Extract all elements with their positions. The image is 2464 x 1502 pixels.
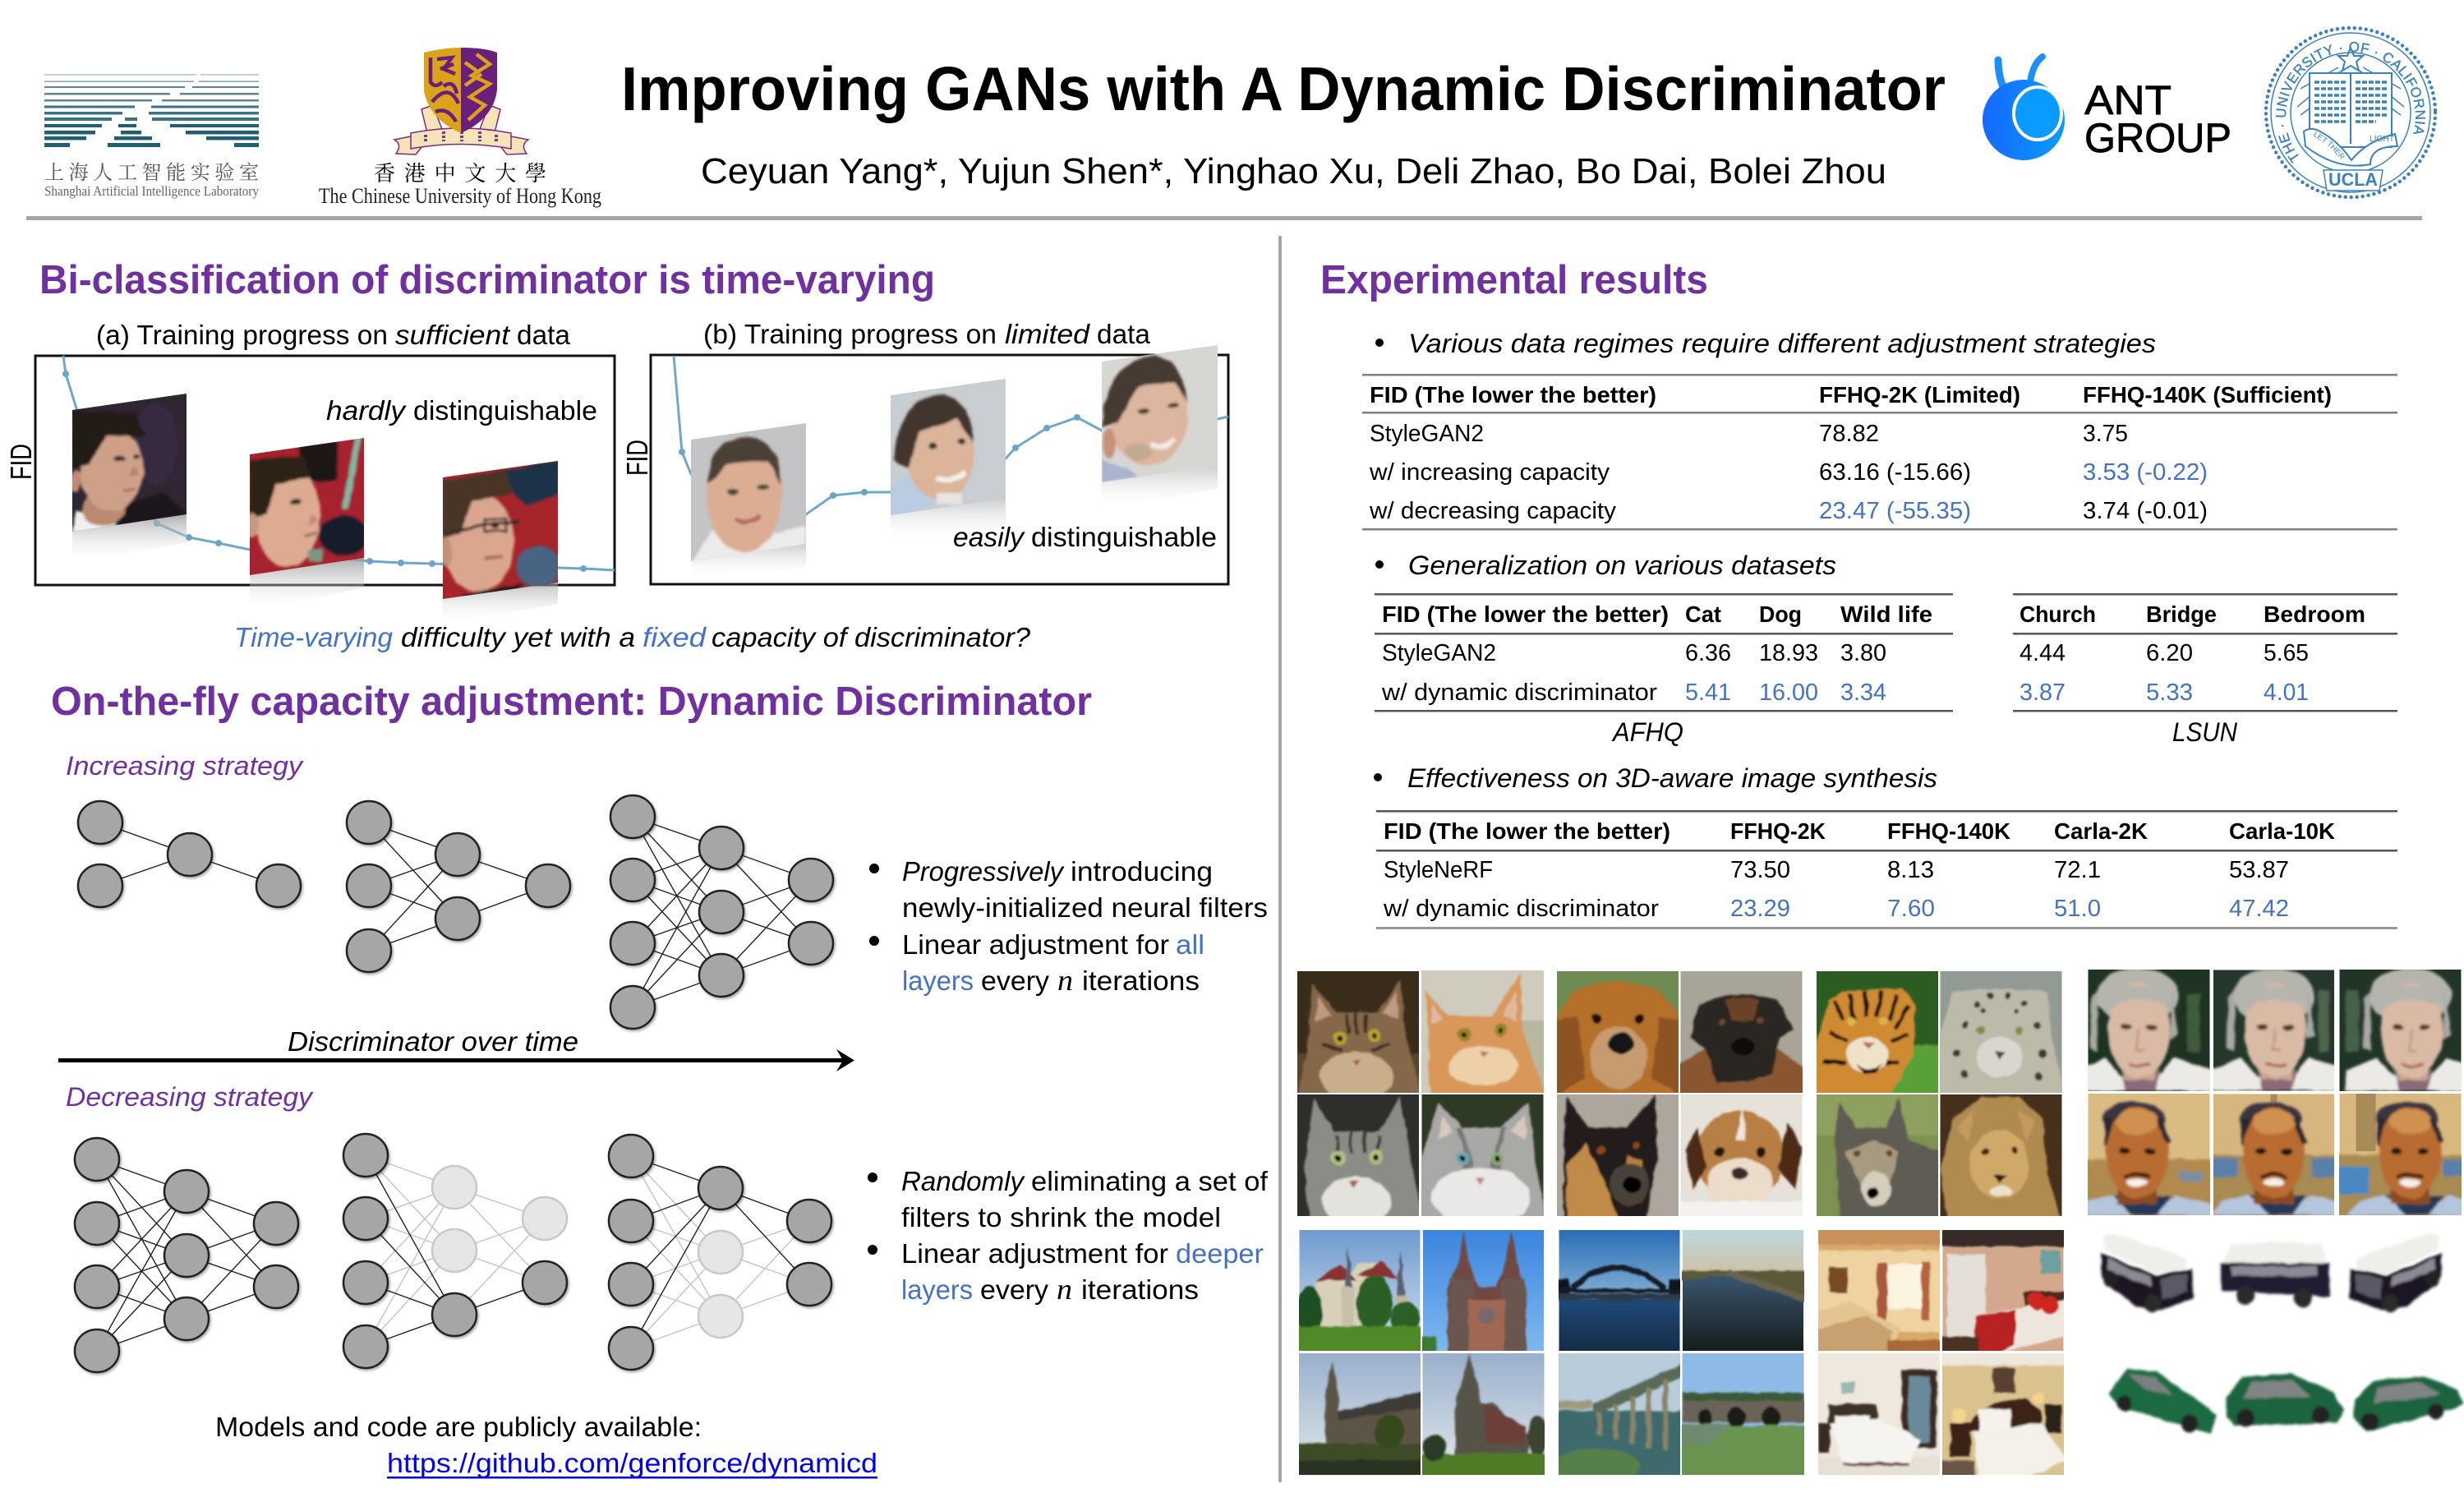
logo: Shanghai AI Laboratory: [44, 74, 259, 199]
table: data regimes: 3.75: [2083, 421, 2128, 447]
bullets: increasing: n: [1057, 964, 1073, 997]
generated face 6: [1102, 345, 1218, 491]
bullets: decreasing: Randomly: [901, 1166, 1025, 1196]
table: 3D-aware synthesis: 47.42: [2229, 896, 2289, 922]
generated face 4: [691, 423, 806, 565]
bullets: increasing: newly-initialized neural filters: [902, 892, 1268, 923]
table: data regimes: FID (The lower the better): [1370, 382, 1656, 408]
chart title b: [703, 319, 1151, 349]
bullets: increasing: iterations: [1082, 965, 1200, 996]
table: AFHQ: 6.36: [1685, 640, 1731, 666]
code link note: [215, 1412, 877, 1479]
network: decreasing step 1: [75, 1138, 298, 1372]
bullets: increasing: layers: [902, 965, 974, 996]
table: data regimes: 63.16 (-15.66): [1819, 459, 1971, 486]
table: data regimes: FFHQ-2K (Limited): [1819, 382, 2020, 408]
authors: Ceyuan Yang*, Yujun Shen*, Yinghao Xu, Deli Zhao, Bo Dai, Bolei Zhou: [701, 151, 1886, 191]
dog golden: [1557, 971, 1679, 1093]
bridge viaduct: [1559, 1353, 1680, 1475]
header rule: [26, 216, 2422, 220]
chart title a: [96, 320, 571, 350]
logo: Shanghai AI Laboratory: 上海人工智能实验室: [44, 162, 259, 184]
network: decreasing step 2: [343, 1134, 567, 1368]
column divider: [1278, 236, 1282, 1482]
logo: Shanghai AI Laboratory: Shanghai Artificial Intelligence Laboratory: [44, 183, 259, 199]
logo: CUHK: 香港中文大學: [374, 162, 546, 186]
table: 3D-aware synthesis: StyleNeRF: [1384, 857, 1493, 883]
bullets: increasing: Linear adjustment for: [902, 929, 1169, 960]
chart a: sufficient data: [4, 356, 615, 624]
table: AFHQ: Dog: [1759, 601, 1802, 627]
chart title b: (b) Training progress on: [703, 319, 997, 349]
table: data regimes: [1362, 374, 2397, 531]
table: 3D-aware synthesis: 72.1: [2054, 857, 2101, 883]
table: LSUN: 5.33: [2146, 680, 2193, 706]
logo: UCLA seal: THE · UNIVERSITY · OF · CALIFORNIA: [2276, 41, 2425, 164]
chart b: limited data: distinguishable: [1031, 522, 1217, 552]
question: difficulty yet with a: [401, 622, 635, 652]
table: 3D-aware synthesis: FID (The lower the better): [1384, 818, 1670, 844]
van view 3: [2349, 1233, 2442, 1312]
bullets: decreasing: n: [1057, 1273, 1072, 1306]
label: increasing strategy: Increasing strategy: [66, 751, 304, 781]
logo: UCLA seal: [2264, 26, 2437, 199]
question: [234, 622, 1031, 652]
table: 3D-aware synthesis: 73.50: [1730, 857, 1790, 883]
table: 3D-aware synthesis: 8.13: [1887, 857, 1934, 883]
table: AFHQ: 16.00: [1759, 680, 1818, 706]
image grid: LSUN samples: [1295, 1226, 2068, 1485]
van view 1: [2101, 1233, 2194, 1312]
table: 3D-aware synthesis: FFHQ-2K: [1730, 818, 1826, 844]
table: LSUN: 6.20: [2146, 640, 2193, 666]
table: 3D-aware synthesis: Carla-2K: [2054, 818, 2148, 844]
man view 2: [2213, 1094, 2334, 1215]
bullets: decreasing: eliminating a set of: [1031, 1166, 1269, 1196]
cat fluffy: [1421, 1094, 1544, 1216]
car view 2: [2227, 1374, 2344, 1427]
table: AFHQ: 18.93: [1759, 640, 1818, 666]
bullets: decreasing: layers: [901, 1274, 973, 1305]
chart title a: data: [517, 320, 571, 350]
dog shepherd: [1557, 1094, 1679, 1216]
generated face 2: [250, 438, 364, 595]
network: increasing step 2: [347, 801, 570, 972]
table: LSUN: 5.65: [2264, 640, 2309, 666]
question: capacity of discriminator?: [712, 622, 1031, 652]
man view 3: [2339, 1094, 2462, 1215]
table: data regimes: 23.47 (-55.35): [1819, 498, 1971, 524]
tiger: [1817, 971, 1938, 1093]
table: AFHQ: [1375, 593, 1953, 747]
arrow: discriminator over time: Discriminator over time: [288, 1026, 578, 1057]
image grid: 3D-aware faces and cars: [2074, 968, 2464, 1434]
cat grey: [1297, 1094, 1419, 1216]
bullets: increasing: all: [1176, 929, 1204, 960]
bedroom warm: [1818, 1230, 1940, 1351]
table: AFHQ: w/ dynamic discriminator: [1381, 680, 1657, 706]
bullet: 3D-aware: Effectiveness on 3D-aware image synthesis: [1407, 763, 1937, 793]
church green lawn: [1299, 1230, 1421, 1351]
church spire: [1422, 1353, 1545, 1475]
bullet: generalization: Generalization on various datasets: [1408, 551, 1836, 580]
bridge arch: [1559, 1230, 1680, 1351]
code link note: Models and code are publicly available:: [215, 1412, 702, 1442]
church cathedral: [1422, 1230, 1544, 1351]
image grid: AFHQ samples: [1293, 970, 2066, 1227]
table: 3D-aware synthesis: 23.29: [1730, 896, 1790, 922]
bullets: increasing: Progressively: [902, 856, 1065, 887]
woman view 1: [2088, 970, 2210, 1091]
bedroom cream: [1942, 1353, 2064, 1475]
table: data regimes: FFHQ-140K (Sufficient): [2083, 382, 2332, 408]
question: fixed: [642, 622, 707, 652]
dog black: [1680, 971, 1803, 1093]
generated face 3: [443, 461, 558, 610]
table: 3D-aware synthesis: 7.60: [1887, 896, 1935, 922]
heading: Experimental results: [1320, 258, 1708, 302]
table: data regimes: 3.53 (-0.22): [2083, 459, 2208, 486]
car view 3: [2354, 1376, 2464, 1431]
network: decreasing step 3: [609, 1135, 831, 1370]
table: 3D-aware synthesis: FFHQ-140K: [1887, 818, 2010, 844]
table: LSUN: 4.01: [2264, 680, 2309, 706]
panel: experimental results: [1293, 258, 2464, 1485]
panel: time-varying bi-classification: [4, 258, 1228, 652]
code link note: https://github.com/genforce/dynamicd: [387, 1448, 877, 1478]
table: AFHQ: Cat: [1685, 601, 1721, 627]
logo: Ant Group: ANT: [2084, 77, 2172, 123]
bedroom white: [1818, 1353, 1940, 1475]
woman view 2: [2213, 970, 2334, 1091]
heading: Bi-classification of discriminator is time-varying: [39, 258, 935, 302]
table: 3D-aware synthesis: 53.87: [2229, 857, 2289, 883]
table: LSUN: 3.87: [2020, 680, 2066, 706]
snow leopard: [1940, 971, 2062, 1093]
man view 1: [2088, 1094, 2210, 1215]
arrow: discriminator over time: [58, 1026, 854, 1071]
bullets: decreasing: filters to shrink the model: [901, 1202, 1221, 1232]
table: LSUN: Church: [2020, 601, 2096, 627]
cat tabby: [1297, 971, 1419, 1093]
table: AFHQ: 5.41: [1685, 680, 1731, 706]
table: data regimes: w/ increasing capacity: [1369, 459, 1610, 486]
church dusk: [1299, 1353, 1421, 1475]
chart title b: data: [1097, 319, 1151, 349]
bullets: increasing: every: [981, 965, 1050, 996]
table: AFHQ: FID (The lower the better): [1382, 601, 1669, 627]
table: AFHQ: 3.80: [1840, 640, 1886, 666]
table: AFHQ: 3.34: [1840, 680, 1886, 706]
table: data regimes: w/ decreasing capacity: [1369, 498, 1617, 524]
chart title a: sufficient: [395, 320, 511, 350]
bullets: increasing: introducing: [1071, 856, 1213, 887]
chart a: sufficient data: distinguishable: [413, 395, 597, 426]
bullets: decreasing: every: [980, 1274, 1049, 1305]
bullets: increasing: [869, 856, 1268, 997]
river dusk: [1682, 1230, 1804, 1351]
logo: Ant Group: GROUP: [2084, 115, 2231, 161]
car view 1: [2108, 1369, 2217, 1434]
logo: UCLA seal: UCLA: [2328, 169, 2378, 190]
bullets: decreasing: Linear adjustment for: [901, 1238, 1168, 1269]
bullets: decreasing: [868, 1166, 1269, 1306]
table: AFHQ: AFHQ: [1611, 717, 1683, 747]
logo: Ant Group: [1983, 57, 2231, 161]
table: data regimes: StyleGAN2: [1370, 421, 1484, 447]
chart b: limited data: [620, 343, 1228, 584]
logo: CUHK: [319, 48, 601, 208]
bedroom red: [1942, 1230, 2064, 1351]
bullet: data regimes: Various data regimes require different adjustment strategies: [1408, 329, 2156, 358]
table: 3D-aware synthesis: [1376, 810, 2397, 929]
table: data regimes: 3.74 (-0.01): [2083, 498, 2208, 524]
bullets: decreasing: deeper: [1176, 1238, 1264, 1269]
woman view 3: [2340, 970, 2462, 1091]
table: 3D-aware synthesis: 51.0: [2054, 896, 2101, 922]
stone bridge: [1682, 1353, 1804, 1475]
table: AFHQ: StyleGAN2: [1382, 640, 1496, 666]
table: 3D-aware synthesis: w/ dynamic discriminator: [1383, 896, 1659, 922]
logo: CUHK: The Chinese University of Hong Kong: [319, 184, 601, 208]
network: increasing step 1: [78, 801, 301, 907]
heading: On-the-fly capacity adjustment: Dynamic Discriminator: [51, 680, 1092, 724]
table: data regimes: 78.82: [1819, 421, 1879, 447]
chart b: limited data: easily: [953, 522, 1026, 552]
dog puppy: [1680, 1094, 1803, 1216]
label: decreasing strategy: Decreasing strategy: [66, 1082, 314, 1112]
chart b: limited data: FID: [620, 440, 654, 476]
generated face 5: [891, 379, 1006, 532]
bullets: decreasing: iterations: [1081, 1274, 1199, 1305]
wolf: [1817, 1094, 1938, 1216]
chart title b: limited: [1005, 319, 1091, 349]
van view 2: [2221, 1242, 2330, 1307]
lion: [1940, 1094, 2062, 1216]
chart a: sufficient data: hardly: [326, 395, 408, 426]
network: increasing step 3: [610, 795, 833, 1029]
table: LSUN: Bedroom: [2264, 601, 2365, 627]
table: LSUN: [2013, 593, 2397, 747]
table: LSUN: LSUN: [2172, 717, 2238, 747]
generated face 1: [72, 394, 187, 547]
table: AFHQ: Wild life: [1840, 601, 1932, 627]
cat orange: [1421, 970, 1544, 1093]
logo: UCLA seal: LIGHT: [2370, 135, 2394, 144]
header: [26, 26, 2437, 220]
question: Time-varying: [234, 622, 394, 652]
chart a: sufficient data: FID: [4, 444, 38, 480]
table: LSUN: 4.44: [2020, 640, 2066, 666]
chart title a: (a) Training progress on: [96, 320, 388, 350]
table: 3D-aware synthesis: Carla-10K: [2229, 818, 2335, 844]
title: Improving GANs with A Dynamic Discriminator: [621, 54, 1946, 123]
panel: dynamic discriminator: [51, 680, 1269, 1479]
table: LSUN: Bridge: [2146, 601, 2217, 627]
